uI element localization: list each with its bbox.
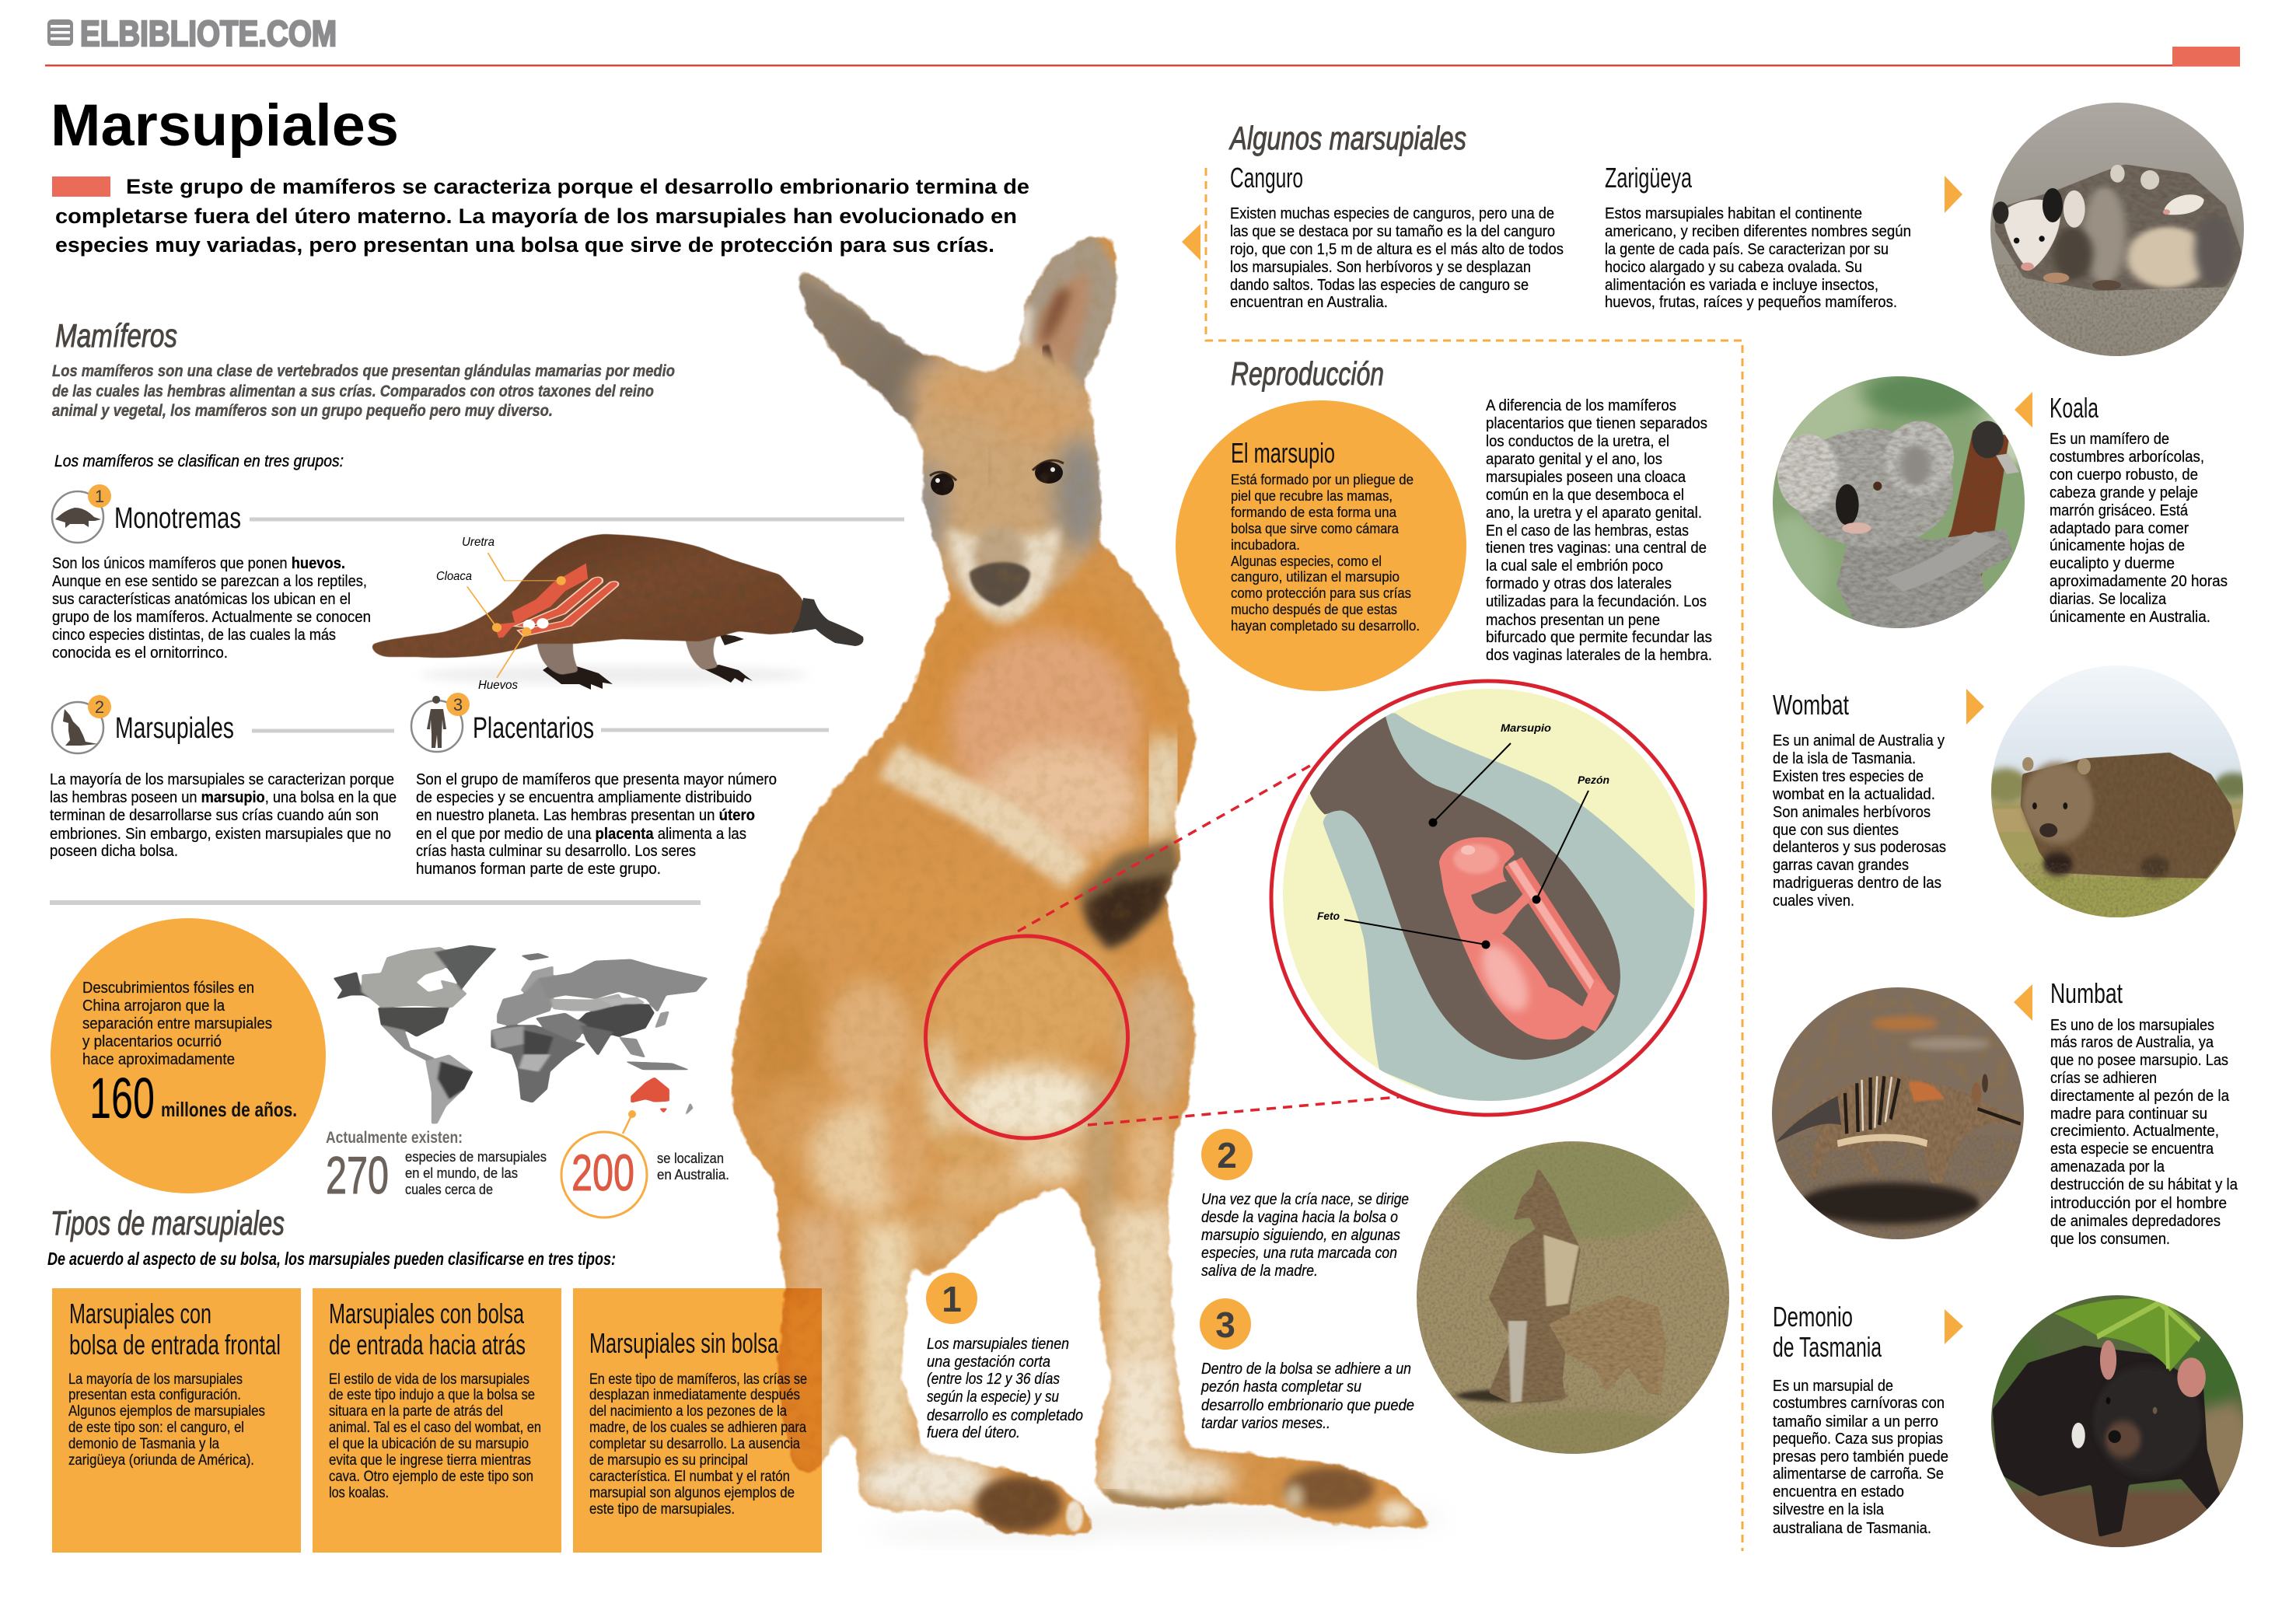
panel: frontal pouch: bolsa de entrada frontal [69, 1329, 281, 1361]
text: Placentarios description: en nuestro planeta. Las hembras presentan un útero [416, 807, 755, 824]
species: Koala: con cuerpo robusto, de [2050, 466, 2198, 484]
stat: species count [326, 1129, 547, 1205]
species: Wombat: madrigueras dentro de las [1773, 875, 1941, 892]
world map [334, 945, 708, 1123]
divider [50, 900, 701, 905]
group 3: Placentarios heading: 3 [453, 695, 463, 714]
step 1 [926, 1273, 1083, 1441]
platypus illustration: Huevos [478, 679, 518, 692]
photo: kangaroo with joey [1411, 1135, 1738, 1462]
species: Demonio de Tasmania: pequeño. Caza sus propias [1773, 1431, 1943, 1448]
text: reproduction explanation: En el caso de las hembras, estas [1486, 522, 1689, 540]
callout: El marsupio: hayan completado su desarrollo. [1231, 617, 1420, 634]
panel: frontal pouch: presentan esta configuración. [68, 1387, 241, 1403]
step 2: 2 [1217, 1135, 1237, 1176]
text: reproduction explanation: formado y otras dos laterales [1486, 575, 1672, 592]
text: Monotremas description [52, 555, 371, 662]
panel: rear pouch: de este tipo indujo a que la bolsa se [329, 1387, 535, 1403]
species: Zarigüeya: Zarigüeya [1605, 162, 1693, 194]
photo: wombat [1991, 666, 2243, 917]
callout: El marsupio: El marsupio [1231, 437, 1335, 469]
text: Placentarios description [416, 771, 777, 878]
species: Numbat: de animales depredadores [2050, 1213, 2221, 1230]
stat: species count: Actualmente existen: [326, 1129, 463, 1147]
panel: rear pouch [313, 1288, 561, 1553]
species: Koala [2015, 392, 2228, 626]
dashed frame [1206, 168, 1742, 1551]
step 3: desarrollo embrionario que puede [1201, 1397, 1414, 1414]
text: reproduction explanation: aparato genital y el ano, los [1486, 451, 1662, 468]
step 3: pezón hasta completar su [1200, 1378, 1361, 1396]
step 2: especies, una ruta marcada con [1201, 1245, 1397, 1262]
text: reproduction explanation: la cual sale el embrión poco [1486, 557, 1663, 575]
text: reproduction explanation: A diferencia de los mamíferos [1486, 397, 1676, 414]
text: reproduction explanation: dos vaginas laterales de la hembra. [1486, 647, 1712, 664]
species: Numbat: Numbat [2050, 977, 2123, 1009]
species: Koala: Es un mamífero de [2050, 431, 2169, 448]
species: Zarigüeya: huevos, frutas, raíces y pequeños mamíferos. [1605, 294, 1897, 311]
species: Numbat: Es uno de los marsupiales [2050, 1017, 2214, 1034]
text: reproduction explanation: común en la que desemboca el [1486, 487, 1684, 504]
anatomy overlay [467, 553, 618, 678]
species: Demonio de Tasmania: presas pero también puede [1773, 1448, 1948, 1466]
photo: Tasmanian devil [1991, 1295, 2243, 1547]
species: Wombat [1772, 689, 1984, 910]
species: Demonio de Tasmania: australiana de Tasmania. [1773, 1520, 1931, 1537]
text: Marsupiales description: las hembras poseen un marsupio, una bolsa en la que [50, 789, 397, 806]
species: Demonio de Tasmania: silvestre en la isla [1773, 1501, 1885, 1518]
callout: El marsupio: bolsa que sirve como cámara [1231, 520, 1400, 536]
callout: El marsupio: Algunas especies, como el [1231, 553, 1382, 569]
species: Koala: marrón grisáceo. Está [2050, 502, 2189, 519]
panel: rear pouch: El estilo de vida de los marsupiales [329, 1371, 529, 1388]
text: Monotremas description: cinco especies distintas, de las cuales la más [52, 627, 336, 644]
species: Zarigüeya: americano, y reciben diferentes nombres según [1605, 223, 1911, 240]
panel: no pouch: de marsupio es su principal [589, 1452, 748, 1469]
photo: opossum [1990, 103, 2244, 356]
callout: El marsupio: formando de esta forma una [1231, 504, 1397, 520]
stat: 200 in Australia: en Australia. [657, 1167, 729, 1183]
stat: 200 in Australia: se localizan [657, 1151, 724, 1166]
panel: no pouch: Marsupiales sin bolsa [589, 1327, 779, 1359]
text: mammals definition [52, 362, 675, 420]
species: Canguro: Existen muchas especies de canguros, pero una de [1230, 205, 1554, 222]
species: Canguro: encuentran en Australia. [1230, 294, 1388, 311]
callout: El marsupio: incubadora. [1231, 536, 1300, 553]
species: Canguro: rojo, que con 1,5 m de altura es el más alto de todos [1230, 241, 1564, 258]
heading: Algunos marsupiales: Algunos marsupiales [1228, 120, 1466, 156]
step 1: según la especie) y su [927, 1389, 1059, 1406]
panel: rear pouch: cava. Otro ejemplo de este tipo son [329, 1469, 533, 1485]
species: Numbat: directamente al pezón de la [2050, 1088, 2230, 1105]
intro block: completarse fuera del útero materno. La mayoría de los marsupiales han evolucionado en [55, 204, 1017, 228]
species: Numbat: introducción por el hombre [2050, 1195, 2227, 1212]
group 3: Placentarios heading [411, 693, 829, 752]
panel: no pouch [573, 1288, 822, 1553]
callout: 160 million years: separación entre marsupiales [82, 1015, 272, 1032]
callout: El marsupio: mucho después de que estas [1231, 601, 1397, 617]
stat: species count: especies de marsupiales [405, 1149, 547, 1165]
species: Numbat: crías se adhieren [2050, 1070, 2157, 1087]
species: Wombat: Son animales herbívoros [1773, 804, 1931, 821]
text: reproduction explanation: los conductos de la uretra, el [1486, 433, 1669, 450]
callout: El marsupio: como protección para sus crías [1231, 585, 1411, 601]
pouch diagram: Feto [1317, 910, 1340, 922]
species: Demonio de Tasmania [1773, 1301, 1963, 1537]
species: Wombat: Es un animal de Australia y [1773, 732, 1945, 749]
step 1: Los marsupiales tienen [927, 1336, 1069, 1353]
intro block: Este grupo de mamíferos se caracteriza porque el desarrollo embrionario termina de [126, 175, 1029, 198]
text: reproduction explanation: bifurcado que permite fecundar las [1486, 629, 1712, 646]
pouch diagram: Pezón [1578, 774, 1609, 786]
step 1: 1 [942, 1279, 962, 1319]
text: Placentarios description: crías hasta culminar su desarrollo. Los seres [416, 843, 696, 860]
species: Koala: Koala [2050, 392, 2099, 424]
text: three groups intro: Los mamíferos se clasifican en tres grupos: [54, 452, 344, 470]
species: Numbat: esta especie se encuentra [2050, 1141, 2214, 1158]
callout: 160 million years: Descubrimientos fósiles en [82, 980, 254, 997]
text: mammals definition: de las cuales las hembras alimentan a sus crías. Comparados con otros taxones del reino [52, 383, 654, 400]
callout: 160 million years: China arrojaron que la [82, 997, 225, 1015]
text: Marsupiales description [50, 771, 397, 860]
panel: frontal pouch: zarigüeya (oriunda de América). [68, 1452, 254, 1469]
step 3 [1200, 1298, 1414, 1432]
platypus illustration [372, 534, 864, 692]
step 2 [1201, 1129, 1409, 1280]
callout: El marsupio: Está formado por un pliegue de [1231, 471, 1414, 487]
species: Demonio de Tasmania: tamaño similar a un perro [1773, 1413, 1938, 1431]
panel: rear pouch: de entrada hacia atrás [329, 1329, 526, 1361]
species: Numbat: madre para continuar su [2050, 1106, 2207, 1123]
text: reproduction explanation: utilizadas para la fecundación. Los [1486, 593, 1707, 610]
species: Zarigüeya: alimentación es variada e incluye insectos, [1605, 277, 1878, 294]
species: Wombat: Wombat [1773, 689, 1849, 721]
species: Koala: únicamente en Australia. [2050, 609, 2210, 626]
species: Koala: aproximadamente 20 horas [2050, 573, 2228, 590]
step 2: saliva de la madre. [1201, 1263, 1318, 1280]
text: Marsupiales description: terminan de desarrollarse sus crías cuando aún son [50, 807, 379, 824]
species: Zarigüeya: la gente de cada país. Se caracterizan por su [1605, 241, 1889, 258]
group 2: Marsupiales heading [52, 695, 394, 753]
species: Canguro: las que se destaca por su tamaño es la del canguro [1230, 223, 1555, 240]
panel: frontal pouch: de este tipo son: el canguro, el [68, 1420, 244, 1436]
panel: no pouch: característica. El numbat y el ratón [589, 1469, 790, 1485]
species: Numbat: amenazada por la [2050, 1158, 2165, 1176]
species: Zarigüeya: Estos marsupiales habitan el continente [1605, 205, 1862, 222]
text: Monotremas description: sus características anatómicas los ubican en el [52, 591, 351, 608]
callout: El marsupio: canguro, utilizan el marsupio [1231, 568, 1400, 585]
step 1: (entre los 12 y 36 días [927, 1371, 1060, 1388]
platypus illustration: Uretra [462, 536, 494, 549]
group 2: Marsupiales heading: Marsupiales [115, 712, 234, 745]
species: Numbat: destrucción de su hábitat y la [2050, 1176, 2238, 1193]
group 3: Placentarios heading: Placentarios [473, 712, 594, 745]
kangaroo main photo [730, 235, 1430, 1540]
step 3: Dentro de la bolsa se adhiere a un [1201, 1361, 1411, 1378]
panel: frontal pouch [52, 1288, 301, 1553]
species: Demonio de Tasmania: Es un marsupial de [1773, 1378, 1893, 1395]
text: Placentarios description: humanos forman parte de este grupo. [416, 861, 661, 878]
text: Marsupiales description: embriones. Sin embargo, existen marsupiales que no [50, 826, 391, 843]
text: reproduction explanation: placentarios que tienen separados [1486, 415, 1707, 432]
step 2: marsupio siguiendo, en algunas [1201, 1227, 1400, 1244]
stat: species count: cuales cerca de [405, 1182, 493, 1197]
text: reproduction explanation: ano, la uretra y el aparato genital. [1486, 505, 1702, 522]
text: Placentarios description: de especies y se encuentra ampliamente distribuido [416, 789, 752, 806]
panel: rear pouch: el que la ubicación de su marsupio [329, 1436, 529, 1452]
text: Monotremas description: Aunque en ese sentido se parezcan a los reptiles, [52, 573, 367, 590]
species: Canguro: los marsupiales. Son herbívoros y se desplazan [1230, 259, 1531, 276]
species: Koala: cabeza grande y pelaje [2050, 484, 2198, 501]
group 1: Monotremas heading [52, 484, 904, 543]
panel: no pouch: completar su desarrollo. La ausencia [589, 1436, 800, 1452]
species: Demonio de Tasmania: encuentra en estado [1773, 1483, 1904, 1500]
stat: 200 in Australia: 200 [571, 1144, 634, 1201]
species: Koala: diarias. Se localiza [2050, 591, 2167, 608]
text: Monotremas description: Son los únicos mamíferos que ponen huevos. [52, 555, 345, 572]
step 2: desde la vagina hacia la bolsa o [1201, 1209, 1398, 1226]
text: Monotremas description: grupo de los mamíferos. Actualmente se conocen [52, 609, 371, 626]
panel: rear pouch: situara en la parte de atrás del [329, 1403, 503, 1420]
pouch highlight circle on kangaroo [925, 936, 1127, 1138]
heading: Tipos de marsupiales: Tipos de marsupiales [51, 1204, 285, 1242]
text: reproduction explanation: machos presentan un pene [1486, 612, 1660, 629]
species: Wombat: garras cavan grandes [1773, 857, 1909, 874]
species: Zarigüeya: hocico alargado y su cabeza ovalada. Su [1605, 259, 1862, 276]
subtitle: pouch types: De acuerdo al aspecto de su bolsa, los marsupiales pueden clasificarse en tres tipos: [47, 1249, 616, 1269]
species: Numbat: que los consumen. [2050, 1231, 2170, 1248]
species: Canguro: Canguro [1230, 162, 1303, 194]
species: Wombat: de la isla de Tasmania. [1773, 750, 1916, 767]
panel: rear pouch: los koalas. [329, 1485, 389, 1501]
callout: 160 million years: millones de años. [161, 1098, 297, 1121]
text: reproduction explanation: marsupiales poseen una cloaca [1486, 469, 1686, 486]
pouch diagram: Marsupio [1501, 721, 1551, 734]
stat: 200 in Australia [561, 1132, 729, 1217]
species: Numbat: que no posee marsupio. Las [2050, 1052, 2228, 1069]
panel: frontal pouch: Marsupiales con [69, 1298, 211, 1329]
species: Wombat: wombat en la actualidad. [1772, 786, 1935, 803]
panel: frontal pouch: demonio de Tasmania y la [68, 1436, 219, 1452]
step 3: 3 [1215, 1305, 1235, 1345]
step 3: tardar varios meses.. [1201, 1415, 1330, 1432]
text: reproduction explanation [1486, 397, 1712, 664]
callout: El marsupio: piel que recubre las mamas, [1231, 487, 1393, 504]
photo: numbat [1772, 987, 2024, 1239]
panel: frontal pouch: La mayoría de los marsupiales [68, 1371, 243, 1388]
text: Marsupiales description: poseen dicha bolsa. [50, 843, 178, 860]
photo: koala [1773, 376, 2025, 628]
species: Demonio de Tasmania: costumbres carnívoras con [1773, 1395, 1945, 1412]
step 1: desarrollo es completado [927, 1407, 1083, 1424]
text: Placentarios description: en el que por medio de una placenta alimenta a las [416, 826, 746, 843]
text: Marsupiales description: La mayoría de los marsupiales se caracterizan porque [50, 771, 394, 788]
species: Demonio de Tasmania: de Tasmania [1773, 1331, 1882, 1363]
title: Marsupiales [51, 93, 399, 159]
panel: no pouch: este tipo de marsupiales. [589, 1501, 735, 1518]
platypus illustration: Cloaca [436, 570, 472, 583]
species: Koala: eucalipto y duerme [2050, 555, 2175, 572]
heading: Mamíferos: Mamíferos [55, 317, 177, 354]
text: Placentarios description: Son el grupo de mamíferos que presenta mayor número [416, 771, 777, 788]
species: Numbat: crecimiento. Actualmente, [2050, 1123, 2219, 1140]
group 1: Monotremas heading: Monotremas [114, 502, 241, 535]
text: mammals definition: animal y vegetal, los mamíferos son un grupo pequeño pero muy diverso. [52, 402, 553, 420]
stat: species count: 270 [326, 1146, 389, 1205]
species: Zarigüeya [1605, 162, 1962, 311]
panel: rear pouch: evita que le ingrese tierra mientras [329, 1452, 531, 1469]
species: Koala: adaptado para comer [2050, 520, 2189, 537]
group 2: Marsupiales heading: 2 [95, 697, 104, 717]
species: Koala: únicamente hojas de [2050, 537, 2185, 554]
callout: 160 million years: y placentarios ocurrió [82, 1033, 222, 1050]
heading: Reproducción: Reproducción [1231, 355, 1384, 392]
dashed zoom lines [1018, 763, 1399, 1125]
species: Wombat: Existen tres especies de [1773, 768, 1924, 785]
text: Monotremas description: conocida es el ornitorrinco. [52, 645, 228, 662]
panel: no pouch: madre, de los cuales se adhieren para [589, 1420, 806, 1436]
callout: El marsupio [1176, 400, 1466, 691]
step 2: Una vez que la cría nace, se dirige [1201, 1191, 1409, 1208]
species: Demonio de Tasmania: Demonio [1773, 1301, 1853, 1333]
callout: 160 million years [51, 918, 326, 1193]
text: mammals definition: Los mamíferos son una clase de vertebrados que presentan glándulas mamarias por medio [52, 362, 675, 380]
panel: no pouch: En este tipo de mamíferos, las crías se [589, 1371, 807, 1388]
callout: 160 million years: 160 [89, 1066, 155, 1130]
group 1: Monotremas heading: 1 [95, 487, 104, 506]
panel: no pouch: del nacimiento a los pezones de la [589, 1403, 787, 1420]
species: Wombat: cuales viven. [1773, 893, 1854, 910]
panel: rear pouch: Marsupiales con bolsa [329, 1298, 525, 1329]
species: Koala: costumbres arborícolas, [2050, 449, 2204, 466]
species: Numbat [2014, 977, 2238, 1248]
Australia pointer [623, 1110, 636, 1134]
species: Canguro: dando saltos. Todas las especies de canguro se [1230, 277, 1529, 294]
header tab [2172, 47, 2240, 66]
panel: rear pouch: animal. Tal es el caso del wombat, en [329, 1420, 541, 1436]
panel: no pouch: desplazan inmediatamente después [589, 1387, 800, 1403]
intro block: especies muy variadas, pero presentan una bolsa que sirve de protección para sus crías. [55, 233, 994, 257]
text: reproduction explanation: tienen tres vaginas: una central de [1486, 540, 1707, 557]
pouch diagram [1271, 681, 1705, 1121]
header rule [45, 65, 2240, 67]
header logo: ELBIBLIOTE.COM [80, 13, 337, 54]
step 1: fuera del útero. [927, 1424, 1020, 1441]
intro block [52, 175, 1029, 257]
species: Canguro [1182, 162, 1564, 311]
species: Numbat: más raros de Australia, ya [2050, 1034, 2214, 1051]
step 1: una gestación corta [927, 1354, 1050, 1371]
species: Demonio de Tasmania: alimentarse de carroña. Se [1773, 1466, 1944, 1483]
species: Wombat: que con sus dientes [1773, 822, 1899, 839]
panel: no pouch: marsupial son algunos ejemplos de [589, 1485, 795, 1501]
species: Wombat: delanteros y sus poderosas [1773, 839, 1946, 856]
callout: 160 million years: hace aproximadamente [82, 1051, 235, 1068]
panel: frontal pouch: Algunos ejemplos de marsupiales [68, 1403, 265, 1420]
stat: species count: en el mundo, de las [405, 1165, 518, 1181]
